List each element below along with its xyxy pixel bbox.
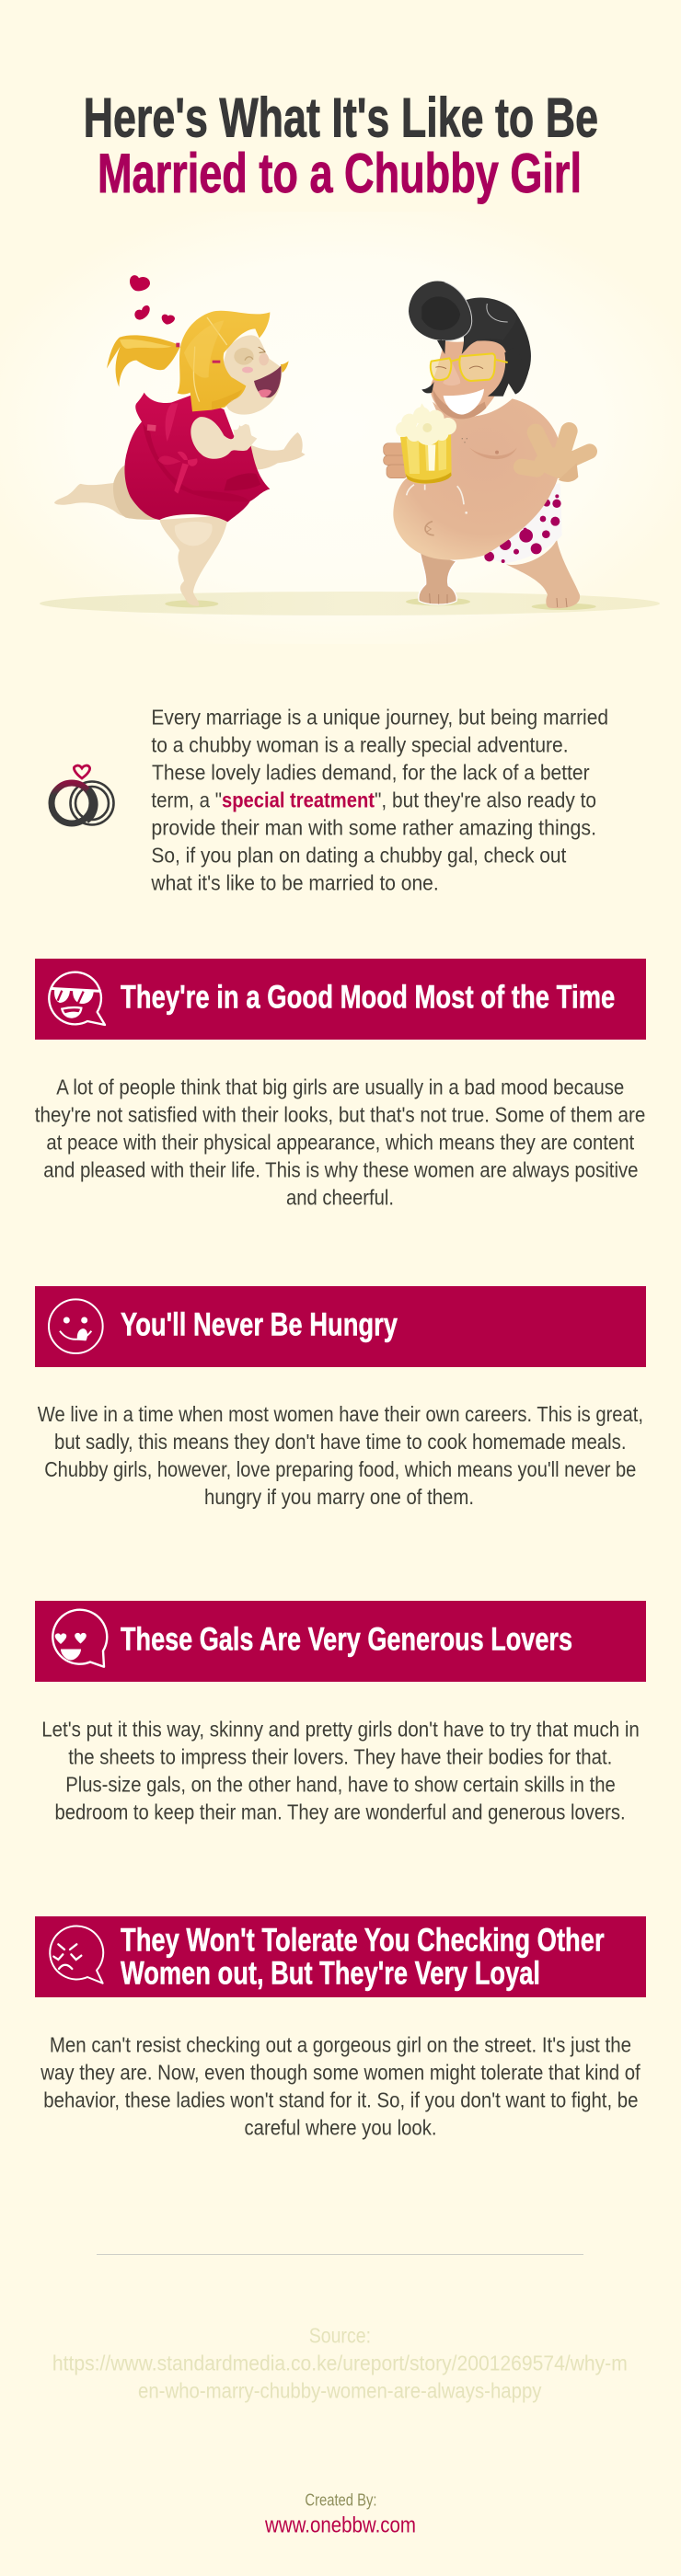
intro paragraph: what it's like to be married to one. [150,871,439,895]
character: man with beer mug [384,282,596,610]
source note [52,2324,628,2403]
head [221,335,283,415]
credit: www.onebbw.com [264,2513,416,2538]
icon: sunglasses emoji [49,972,105,1025]
legs [419,550,456,604]
body text [35,1075,645,1209]
mouth [444,389,484,415]
body text: but sadly, this means they don't have time to cook homemade meals. [54,1430,626,1454]
shoulder and near arm [190,417,257,459]
body text: A lot of people think that big girls are usually in a bad mood because [56,1075,624,1098]
banner heading: Women out, But They're Very Loyal [121,1956,540,1992]
beer mug [400,432,452,484]
foam [396,403,456,445]
icon: heart eyes emoji [52,1610,107,1667]
hearts [130,275,175,325]
banner: never hungry [35,1286,646,1367]
mouth [254,365,282,397]
torso [393,398,560,560]
ground shadow [40,592,660,615]
ponytail [107,335,180,387]
fist [384,443,408,478]
sunglasses [431,353,508,381]
intro: rings icon and paragraph [52,706,608,895]
front leg [159,515,228,606]
banner: good mood [35,959,646,1040]
body text [38,1402,643,1509]
source note: Source: [309,2324,371,2348]
icon: angry emoji [50,1926,103,1984]
body text: the sheets to impress their lovers. They have their bodies for that. [68,1744,612,1768]
bow [158,452,198,494]
top hair [462,298,517,354]
back leg [54,463,156,520]
dress [124,393,270,522]
body text [41,1717,640,1823]
source note: en-who-marry-chubby-women-are-always-happy [138,2379,542,2403]
boxers [485,483,562,563]
back hair [463,298,531,397]
intro paragraph [150,706,608,895]
intro paragraph: ", but they're also ready to [375,788,596,812]
intro paragraph: So, if you plan on dating a chubby gal, check out [151,844,567,868]
body text: Plus-size gals, on the other hand, have to show certain skills in the [65,1772,616,1796]
intro paragraph: These lovely ladies demand, for the lack of a better [152,761,590,785]
hair [178,311,270,411]
icon: wedding rings with heart [52,765,114,824]
beer drips [407,485,464,504]
intro paragraph: special treatment [222,788,375,812]
body text: hungry if you marry one of them. [204,1485,474,1509]
intro paragraph: to a chubby woman is a really special adventure. [151,733,569,757]
body text: careful where you look. [245,2116,436,2140]
character: woman dancing with hearts [54,275,306,607]
hero illustration: couple [40,275,660,615]
body text: and cheerful. [286,1185,394,1209]
nose [443,363,460,385]
intro paragraph: term, a " [151,788,222,812]
banner heading [121,1923,605,1992]
far arm [250,432,306,469]
intro paragraph: Every marriage is a unique journey, but being married [151,706,608,730]
credit: Created By: [305,2490,377,2509]
source note: https://www.standardmedia.co.ke/ureport/story/2001269574/why-m [52,2352,628,2375]
panel: generous lovers [35,1601,646,1823]
icon: tongue smiley [49,1299,103,1353]
panel: loyal [35,1916,646,2140]
face [431,340,506,419]
banner: loyal [35,1916,646,1997]
intro paragraph: provide their man with some rather amazing things. [151,816,596,840]
banner: generous lovers [35,1601,646,1682]
panel: good mood [35,959,646,1209]
title [84,86,598,204]
credit [264,2490,416,2538]
panel: never hungry [35,1286,646,1509]
banner heading: You'll Never Be Hungry [121,1307,398,1343]
body text [40,2033,641,2140]
reaching hand [522,431,590,469]
